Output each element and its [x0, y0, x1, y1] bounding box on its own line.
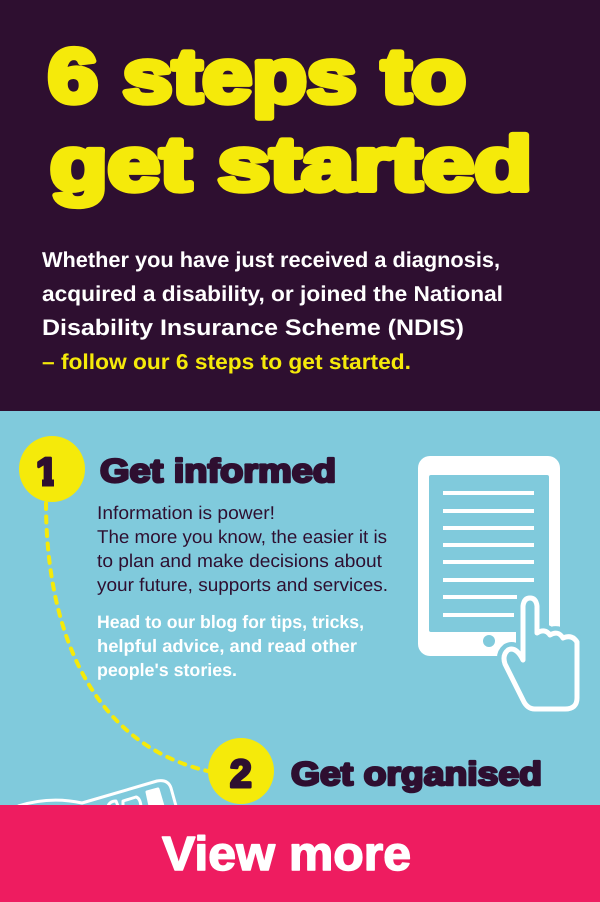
title: 6 steps to: [48, 34, 466, 119]
step 1 number badge: 1: [36, 451, 58, 494]
step 1 body text: Information is power!: [97, 502, 275, 523]
step 1 body text: The more you know, the easier it is: [97, 526, 387, 547]
dashed path between step 1 and step 2: [46, 503, 212, 772]
step 1 number badge: [19, 436, 85, 502]
intro text: acquired a disability, or joined the National: [42, 282, 503, 306]
step 1 blog link text: people's stories.: [97, 660, 237, 680]
intro text: Disability Insurance Scheme (NDIS): [42, 315, 464, 340]
step 1 body text: your future, supports and services.: [97, 574, 388, 595]
intro text: Whether you have just received a diagnosis,: [42, 248, 500, 272]
title: [48, 34, 532, 207]
step 2 number badge: [208, 738, 274, 804]
step 2 heading: Get organised: [291, 755, 542, 792]
step 1 body text: to plan and make decisions about: [97, 550, 382, 571]
icon: tablet with pointing hand: [418, 456, 577, 709]
view more button: [0, 805, 600, 902]
panel: header background: [0, 0, 600, 411]
step 1 body text: [97, 502, 388, 595]
intro text: – follow our 6 steps to get started.: [42, 350, 411, 374]
intro text: [42, 248, 503, 374]
step 1 heading: Get informed: [100, 452, 336, 489]
panel: steps background: [0, 411, 600, 805]
step 1 blog link text: [97, 612, 364, 680]
step 1 blog link text: helpful advice, and read other: [97, 636, 357, 656]
step 2 number badge: 2: [230, 753, 252, 796]
icon: organiser partly hidden: [18, 781, 176, 806]
title: get started: [50, 122, 532, 207]
view more button: View more: [162, 828, 411, 881]
step 1 blog link text: Head to our blog for tips, tricks,: [97, 612, 364, 632]
